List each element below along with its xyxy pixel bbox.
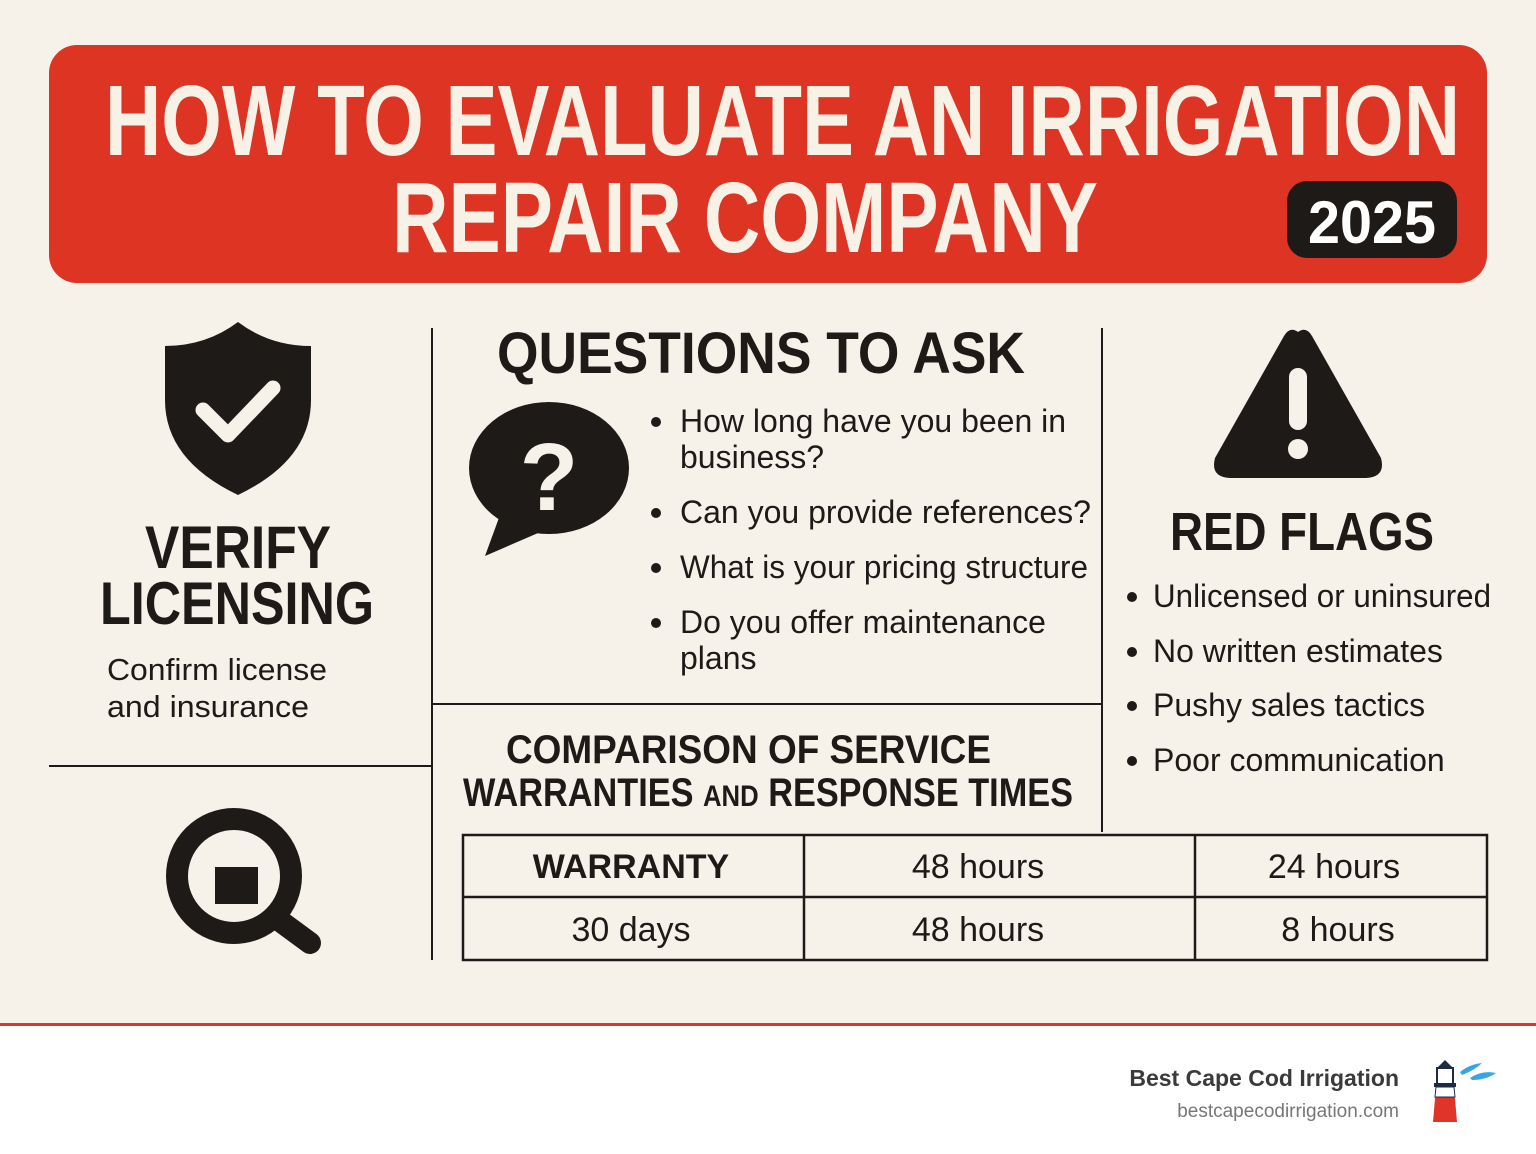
table: warranties: 48 hours — [912, 911, 1044, 949]
year badge — [1287, 181, 1457, 258]
title — [105, 65, 1460, 274]
table: warranties: 24 hours — [1268, 848, 1400, 886]
list: red flags: No written estimates — [1153, 633, 1443, 669]
icon: warning triangle — [1214, 330, 1382, 478]
list: questions: Can you provide references? — [680, 494, 1091, 530]
list: red flags: Unlicensed or uninsured — [1153, 578, 1491, 614]
icon: speech bubble question: ? — [520, 424, 578, 531]
heading: questions to ask: QUESTIONS TO ASK — [497, 321, 1025, 386]
list: red flags — [1127, 578, 1491, 778]
table: warranties: 8 hours — [1281, 911, 1395, 949]
heading: verify licensing: LICENSING — [100, 570, 374, 637]
icon: speech bubble question — [469, 402, 629, 556]
list: questions: Do you offer maintenance — [680, 604, 1046, 640]
heading: verify licensing — [100, 514, 374, 637]
list: red flags: Pushy sales tactics — [1153, 687, 1425, 723]
icon: magnifier — [177, 819, 310, 943]
list: questions: How long have you been in — [680, 403, 1066, 439]
icon: shield check — [165, 322, 311, 495]
text: confirm license — [107, 652, 327, 724]
heading: comparison: WARRANTIES AND RESPONSE TIMES — [463, 771, 1073, 815]
footer brand text — [1129, 1065, 1399, 1122]
footer brand text: bestcapecodirrigation.com — [1177, 1101, 1399, 1122]
table: warranties — [463, 835, 1487, 960]
table: warranties: 30 days — [571, 911, 691, 949]
heading: comparison: COMPARISON OF SERVICE — [506, 728, 991, 772]
table: warranties: WARRANTY — [533, 848, 730, 886]
list: red flags: Poor communication — [1153, 742, 1445, 778]
list: questions — [651, 403, 1091, 676]
year badge: 2025 — [1308, 189, 1436, 256]
list: questions: business? — [680, 439, 824, 475]
title banner — [49, 45, 1487, 283]
icon: lighthouse — [1433, 1060, 1496, 1122]
text: confirm license: Confirm license — [107, 652, 327, 687]
heading: red flags: RED FLAGS — [1170, 502, 1434, 562]
text: confirm license: and insurance — [107, 689, 309, 724]
footer brand text: Best Cape Cod Irrigation — [1129, 1065, 1399, 1091]
heading: comparison — [463, 728, 1073, 815]
title: REPAIR COMPANY — [392, 162, 1098, 274]
heading: verify licensing: VERIFY — [145, 514, 331, 581]
list: questions: What is your pricing structure — [680, 549, 1088, 585]
list: questions: plans — [680, 640, 756, 676]
table: warranties: 48 hours — [912, 848, 1044, 886]
